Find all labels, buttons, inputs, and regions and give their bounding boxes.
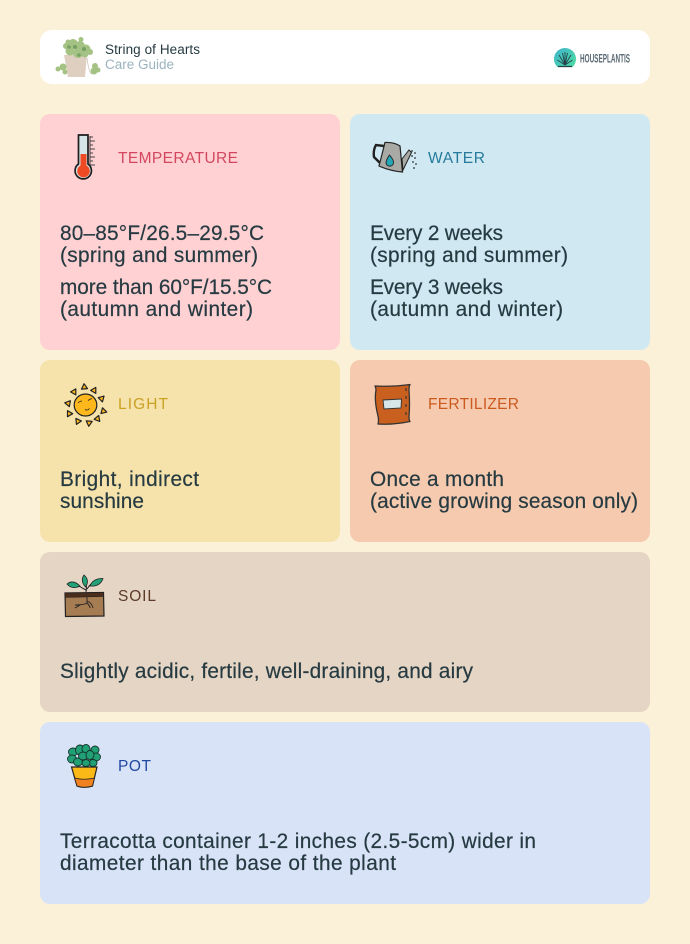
heading: temperature: TEMPERATURE [118,150,238,167]
text: water details: Every 2 weeks [370,222,503,245]
heading: water: WATER [428,150,485,167]
icon: thermometer [75,135,95,179]
text: light details: sunshine [60,490,144,513]
panel: temperature [40,114,340,350]
icon: string of hearts plant [56,37,100,77]
text: light details: Bright, indirect [60,468,199,491]
icon: potted succulent [68,744,100,787]
text: water details: (autumn and winter) [370,298,563,321]
text: temperature details: 80–85°F/26.5–29.5°C [60,222,264,245]
text: temperature details: (autumn and winter) [60,298,253,321]
panel: light [40,360,340,542]
header title: String of Hearts [105,42,200,57]
text: temperature details: (spring and summer) [60,244,258,267]
icon: soil with sprout [65,575,104,616]
text: light details [60,468,199,513]
text: water details: Every 3 weeks [370,276,503,299]
text: water details: (spring and summer) [370,244,568,267]
heading: soil: SOIL [118,588,156,605]
panel: pot [40,722,650,904]
heading: light: LIGHT [118,396,169,413]
text: fertilizer details [370,468,638,513]
panel: soil [40,552,650,712]
heading: fertilizer: FERTILIZER [428,396,519,413]
panel: fertilizer [350,360,650,542]
text: soil details: Slightly acidic, fertile, well-draining, and airy [60,660,474,683]
logo: Houseplantis [554,48,630,67]
text: fertilizer details: (active growing season only) [370,490,638,513]
icon: watering can [374,142,417,172]
text: water details [370,222,568,321]
text: pot details: Terracotta container 1-2 inches (2.5-5cm) wider in [60,830,536,853]
text: temperature details: more than 60°F/15.5°C [60,276,272,299]
heading: pot: POT [118,758,152,775]
header subtitle: Care Guide [105,57,174,72]
icon: sun [64,383,107,427]
header bar [40,30,650,84]
text: pot details: diameter than the base of the plant [60,852,396,875]
panel: water [350,114,650,350]
text: fertilizer details: Once a month [370,468,504,491]
text: pot details [60,830,536,875]
text: temperature details [60,222,272,321]
logo: Houseplantis: HOUSEPLANTIS [580,54,630,66]
icon: fertilizer bag [375,384,410,424]
